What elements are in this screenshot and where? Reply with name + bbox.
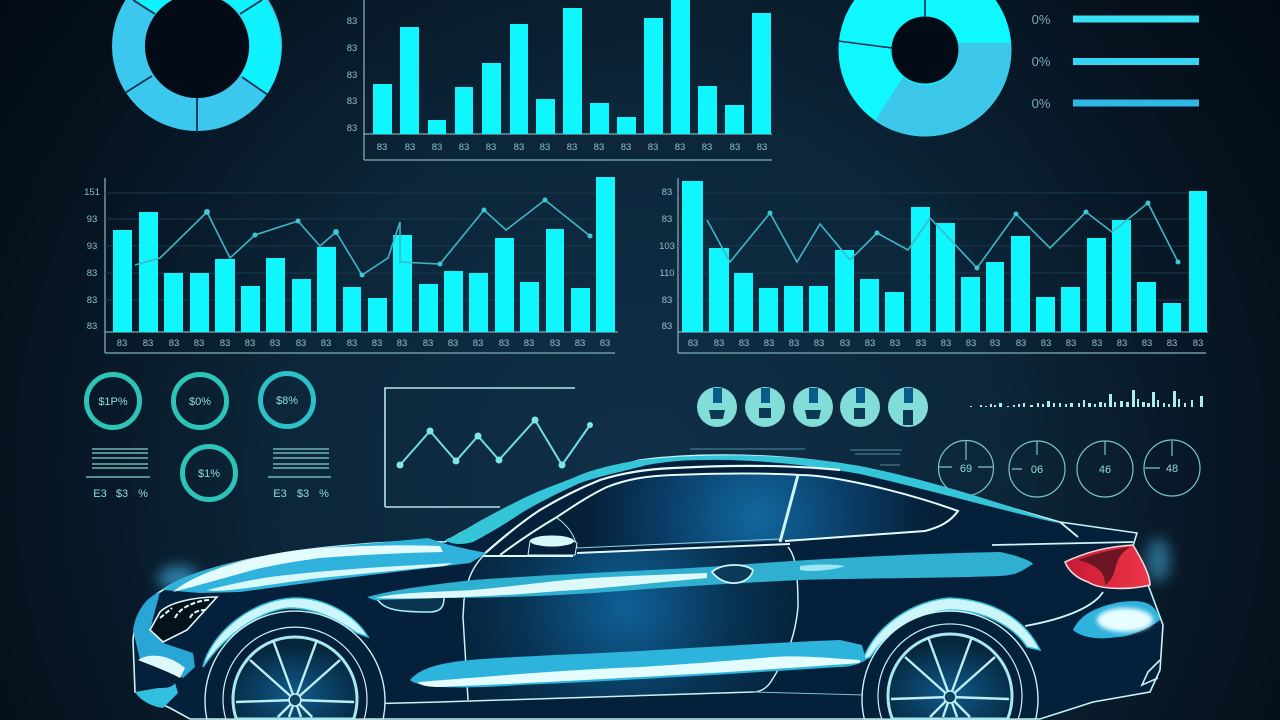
left combo chart: 83 xyxy=(524,338,534,349)
donut chart right xyxy=(838,0,1011,136)
progress rings and lists: % xyxy=(138,488,148,500)
right combo chart: 83 xyxy=(1092,338,1102,349)
front fascia xyxy=(133,592,195,678)
left combo chart: 83 xyxy=(87,321,97,332)
front wheel xyxy=(205,611,385,719)
left combo chart: 83 xyxy=(296,338,306,349)
top bar chart xyxy=(347,0,772,160)
left combo chart: 151 xyxy=(84,187,100,198)
car xyxy=(133,455,1170,719)
progress rings and lists: $0% xyxy=(189,396,211,408)
left combo chart: 83 xyxy=(169,338,179,349)
door handle xyxy=(712,565,753,583)
right combo chart: 110 xyxy=(659,268,675,279)
right combo chart: 83 xyxy=(990,338,1000,349)
left combo chart: 83 xyxy=(600,338,610,349)
top bar chart: 83 xyxy=(567,142,577,153)
left combo chart: 83 xyxy=(423,338,433,349)
left combo chart: 83 xyxy=(245,338,255,349)
headlight xyxy=(150,597,217,642)
dial gauges: 69 xyxy=(960,463,972,475)
side stripe xyxy=(367,552,1033,604)
left combo chart: 83 xyxy=(347,338,357,349)
right combo chart: 83 xyxy=(1167,338,1177,349)
b-pillar xyxy=(780,475,798,542)
right combo chart: 83 xyxy=(714,338,724,349)
right combo chart: 83 xyxy=(1066,338,1076,349)
rear reflection xyxy=(1073,601,1160,638)
right combo chart: 83 xyxy=(662,295,672,306)
right combo chart: 83 xyxy=(890,338,900,349)
dial gauges xyxy=(938,440,1200,497)
left combo chart: 83 xyxy=(143,338,153,349)
right combo chart: 103 xyxy=(659,241,675,252)
right combo chart: 83 xyxy=(688,338,698,349)
right combo chart: 83 xyxy=(865,338,875,349)
right combo chart: 83 xyxy=(840,338,850,349)
left combo chart: 83 xyxy=(372,338,382,349)
roof stripe xyxy=(445,455,1062,544)
top bar chart: 83 xyxy=(347,43,357,54)
top bar chart: 83 xyxy=(377,142,387,153)
top bar chart: 83 xyxy=(757,142,767,153)
right combo chart: 83 xyxy=(941,338,951,349)
top bar chart: 83 xyxy=(648,142,658,153)
right combo chart: 83 xyxy=(1117,338,1127,349)
progress rings and lists: $3 xyxy=(116,488,128,500)
top bar chart: 83 xyxy=(594,142,604,153)
trunk lines xyxy=(992,522,1133,626)
top bar chart: 83 xyxy=(730,142,740,153)
top bar chart: 83 xyxy=(459,142,469,153)
right combo chart: 83 xyxy=(662,321,672,332)
left combo chart: 93 xyxy=(87,214,97,225)
dial gauges: 06 xyxy=(1031,464,1043,476)
car glows xyxy=(158,538,1170,612)
left combo chart xyxy=(84,177,618,353)
left combo chart: 83 xyxy=(220,338,230,349)
progress rings and lists xyxy=(86,374,331,500)
front wheel arch xyxy=(203,598,368,667)
right combo chart: 83 xyxy=(966,338,976,349)
waveform xyxy=(970,390,1203,407)
legend top right: 0% xyxy=(1032,96,1051,111)
top bar chart: 83 xyxy=(347,123,357,134)
left combo chart: 83 xyxy=(397,338,407,349)
top bar chart: 83 xyxy=(675,142,685,153)
top bar chart: 83 xyxy=(405,142,415,153)
left combo chart: 83 xyxy=(194,338,204,349)
legend top right xyxy=(1032,12,1199,111)
rear wheel arch xyxy=(863,598,1040,660)
rear bumper detail xyxy=(1142,660,1160,685)
lower bumper xyxy=(135,683,178,708)
right combo chart: 83 xyxy=(764,338,774,349)
progress rings and lists: % xyxy=(319,488,329,500)
fender scoop xyxy=(378,598,444,612)
door lines xyxy=(360,547,798,704)
top bar chart: 83 xyxy=(347,16,357,27)
rear wheel xyxy=(862,611,1038,719)
left combo chart: 83 xyxy=(321,338,331,349)
left combo chart: 83 xyxy=(550,338,560,349)
left combo chart: 83 xyxy=(575,338,585,349)
top bar chart: 83 xyxy=(540,142,550,153)
left combo chart: 83 xyxy=(473,338,483,349)
right combo chart: 83 xyxy=(916,338,926,349)
left combo chart: 83 xyxy=(87,295,97,306)
door panel xyxy=(463,546,798,700)
roof white lines xyxy=(483,466,840,555)
progress rings and lists: $1% xyxy=(198,468,220,480)
icon row xyxy=(697,387,928,427)
trend line chart xyxy=(385,388,593,507)
progress rings and lists: $8% xyxy=(276,395,298,407)
window frame xyxy=(500,474,958,555)
tail light xyxy=(1065,545,1150,588)
legend top right: 0% xyxy=(1032,54,1051,69)
top bar chart: 83 xyxy=(486,142,496,153)
progress rings and lists: E3 xyxy=(93,488,107,500)
right combo chart: 83 xyxy=(789,338,799,349)
left combo chart: 83 xyxy=(87,268,97,279)
lower stripe xyxy=(410,640,866,687)
dial gauges: 48 xyxy=(1166,463,1178,475)
top bar chart: 83 xyxy=(514,142,524,153)
donut chart left xyxy=(125,0,281,133)
right combo chart: 83 xyxy=(1193,338,1203,349)
right combo chart: 83 xyxy=(662,187,672,198)
right combo chart: 83 xyxy=(1041,338,1051,349)
left combo chart: 83 xyxy=(117,338,127,349)
right combo chart xyxy=(659,178,1208,353)
mirror xyxy=(528,518,577,555)
right combo chart: 83 xyxy=(1016,338,1026,349)
right combo chart: 83 xyxy=(814,338,824,349)
top bar chart: 83 xyxy=(702,142,712,153)
top bar chart: 83 xyxy=(347,96,357,107)
left combo chart: 83 xyxy=(448,338,458,349)
progress rings and lists: E3 xyxy=(273,488,287,500)
car body xyxy=(133,455,1163,719)
progress rings and lists: $3 xyxy=(297,488,309,500)
left combo chart: 93 xyxy=(87,241,97,252)
right combo chart: 83 xyxy=(739,338,749,349)
left combo chart: 83 xyxy=(270,338,280,349)
hood highlight xyxy=(163,538,487,593)
dial gauges: 46 xyxy=(1099,464,1111,476)
right combo chart: 83 xyxy=(1142,338,1152,349)
left combo chart: 83 xyxy=(499,338,509,349)
progress rings and lists: $1P% xyxy=(98,396,128,408)
right combo chart: 83 xyxy=(662,214,672,225)
window glass xyxy=(503,475,958,555)
top bar chart: 83 xyxy=(432,142,442,153)
tiny lines above the roof xyxy=(690,449,902,465)
legend top right: 0% xyxy=(1032,12,1051,27)
top bar chart: 83 xyxy=(621,142,631,153)
top bar chart: 83 xyxy=(347,70,357,81)
